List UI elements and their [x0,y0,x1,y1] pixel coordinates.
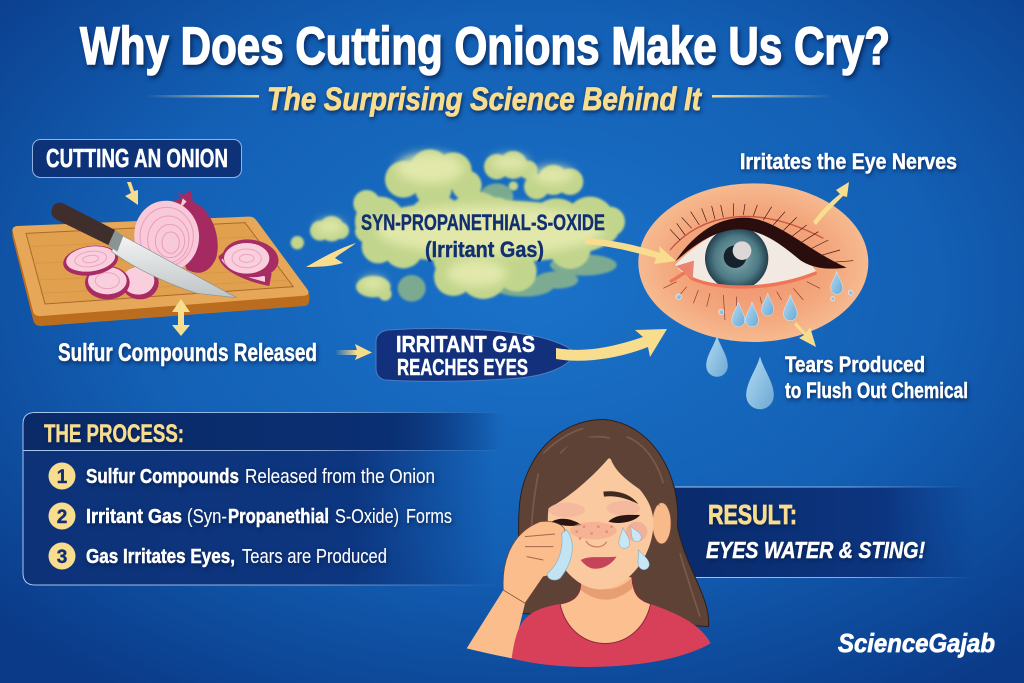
shirt [512,604,711,667]
illustration: eye with tears [638,183,868,342]
text: tears produced [785,352,968,403]
text: tears produced: Tears Produced [785,352,925,377]
lower lid [670,273,817,287]
arrow: eye to nerves [813,182,849,225]
step 1: Sulfur Compounds [86,466,239,488]
step 2: Forms [406,506,452,528]
hand [503,521,565,603]
slice: right onion slices [218,236,281,286]
cloud text: (Irritant Gas) [425,237,544,262]
panel: the process [23,412,505,585]
step 2 [48,502,452,530]
skin [638,183,868,342]
arrow: tears down [794,322,816,347]
cloud text: SYN-PROPANETHIAL-S-OXIDE [361,210,605,235]
arrow: cloud to eye [585,238,676,264]
subtitle: The Surprising Science Behind It [267,81,702,117]
hair [519,419,709,627]
label: cutting an onion [32,140,242,178]
step 1: 1 [57,467,68,488]
step 3: 3 [57,547,67,568]
panel: result: RESULT: [708,499,797,530]
step 2: Propanethial [228,506,329,528]
brows and eyes [548,491,640,526]
panel: result [675,486,975,578]
illustration: cutting board with onion and knife [12,190,309,326]
label: irritant gas reaches eyes [376,328,573,381]
label: irritant gas reaches eyes: REACHES EYES [397,354,528,380]
cloud lumps [291,149,625,302]
step 2: 2 [57,507,67,528]
double arrow: board to sulfur compounds [172,299,190,336]
step 1: Released from the Onion [245,466,435,488]
step 3: Tears are Produced [242,546,387,568]
onion half [130,190,218,275]
arrow: gas label to eye [556,329,667,361]
label: cutting an onion: CUTTING AN ONION [46,143,228,173]
heading: THE PROCESS: [44,420,184,448]
mouth [581,557,617,569]
face [548,458,653,589]
eye white and iris [675,229,816,288]
arrow: cloud to board [306,243,356,267]
text: irritates the eye nerves: Irritates the Eye Nerves [740,149,957,174]
eyelid liner [675,218,847,269]
step 3 [48,542,387,570]
arm [467,590,525,658]
ear [652,503,671,544]
cloud: irritant gas [291,149,625,302]
label: irritant gas reaches eyes: IRRITANT GAS [396,331,535,357]
logo: sciencegajab: ScienceGajab [838,628,995,658]
bangs [540,437,660,510]
knife [51,203,237,298]
step 3: Gas Irritates Eyes, [86,546,235,568]
tears on cheek [618,524,651,571]
illustration: crying woman [467,419,711,667]
neck and chest [560,577,651,643]
slice: back slices [61,242,159,299]
tissue [547,530,572,580]
step 2: Irritant Gas [86,506,182,528]
step 2: S-Oxide) [335,506,399,528]
step 2: (Syn- [187,506,227,528]
step 1 [48,462,435,490]
large tear drop 2 [746,356,774,409]
tears on eye [676,271,853,327]
cloud text [361,210,605,262]
nose [586,541,607,547]
arrow: label to onion [125,182,138,205]
text: tears produced: to Flush Out Chemical [785,378,968,403]
arrow: sulfur to gas label [335,344,372,360]
large tear drop 1 [706,335,728,377]
cutting board [12,217,309,326]
text: sulfur compounds released: Sulfur Compounds Released [58,339,317,367]
blush and freckles [570,522,647,542]
panel: result: EYES WATER & STING! [706,537,925,563]
